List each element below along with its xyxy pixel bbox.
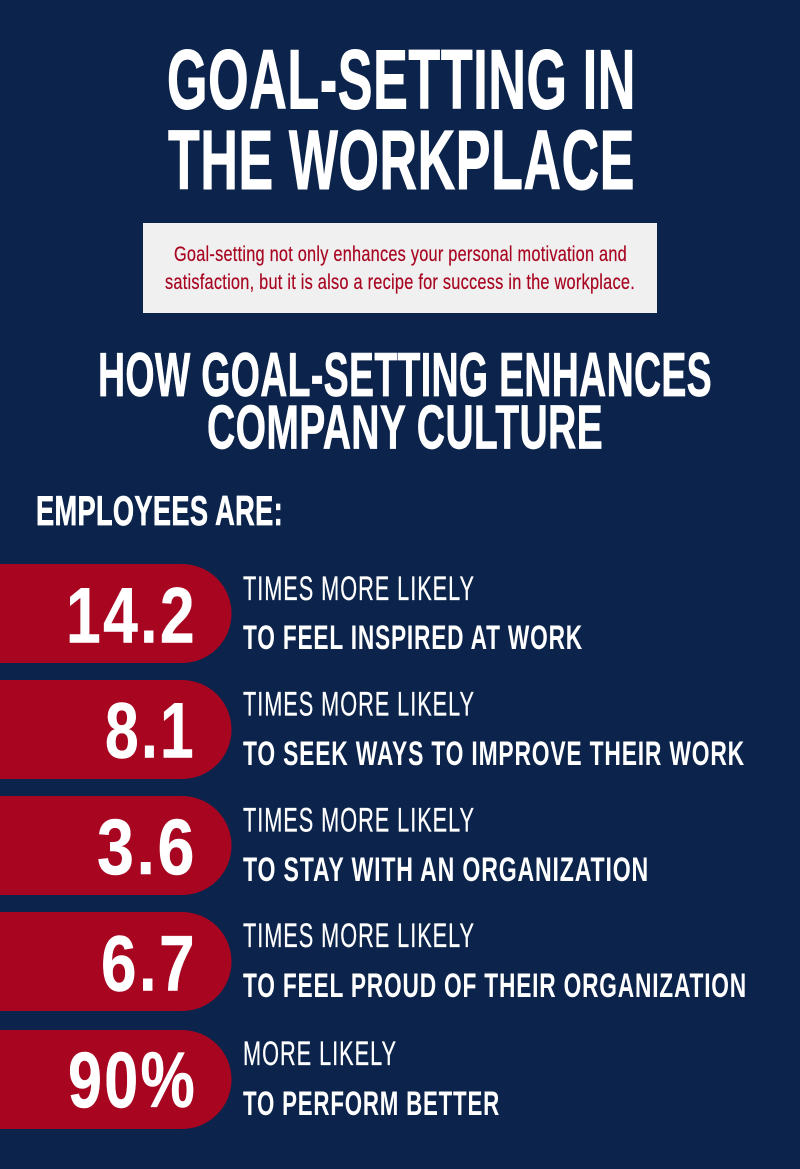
stat row: 8.1 — [0, 680, 745, 779]
stat row: 90%: 90% — [68, 1035, 197, 1124]
intro callout box: satisfaction, but it is also a recipe for success in the workplace. — [165, 271, 635, 294]
stat row: 90% — [0, 1030, 500, 1129]
stat row: 14.2 — [0, 564, 583, 663]
stat row: 6.7: 6.7 — [101, 918, 197, 1008]
stat row: 3.6: TIMES MORE LIKELY — [243, 802, 475, 840]
intro callout box — [143, 223, 657, 313]
stat row: 6.7 — [0, 912, 747, 1011]
stat row: 8.1: TIMES MORE LIKELY — [243, 686, 475, 724]
section heading — [98, 341, 712, 462]
stat row: 14.2: TO FEEL INSPIRED AT WORK — [243, 619, 583, 657]
stat row: 14.2: 14.2 — [66, 570, 197, 660]
stat row: 90%: TO PERFORM BETTER — [243, 1085, 500, 1123]
stat row: 90%: MORE LIKELY — [243, 1035, 397, 1073]
intro callout box: Goal-setting not only enhances your personal motivation and — [174, 243, 627, 266]
stat row: 3.6 — [0, 796, 649, 895]
subheading: EMPLOYEES ARE: — [36, 487, 283, 534]
stat row: 6.7: TIMES MORE LIKELY — [243, 917, 475, 955]
title — [167, 32, 636, 207]
stat row: 14.2: TIMES MORE LIKELY — [243, 570, 475, 608]
stat row: 3.6: 3.6 — [97, 802, 197, 891]
stat row: 8.1: 8.1 — [105, 686, 196, 774]
